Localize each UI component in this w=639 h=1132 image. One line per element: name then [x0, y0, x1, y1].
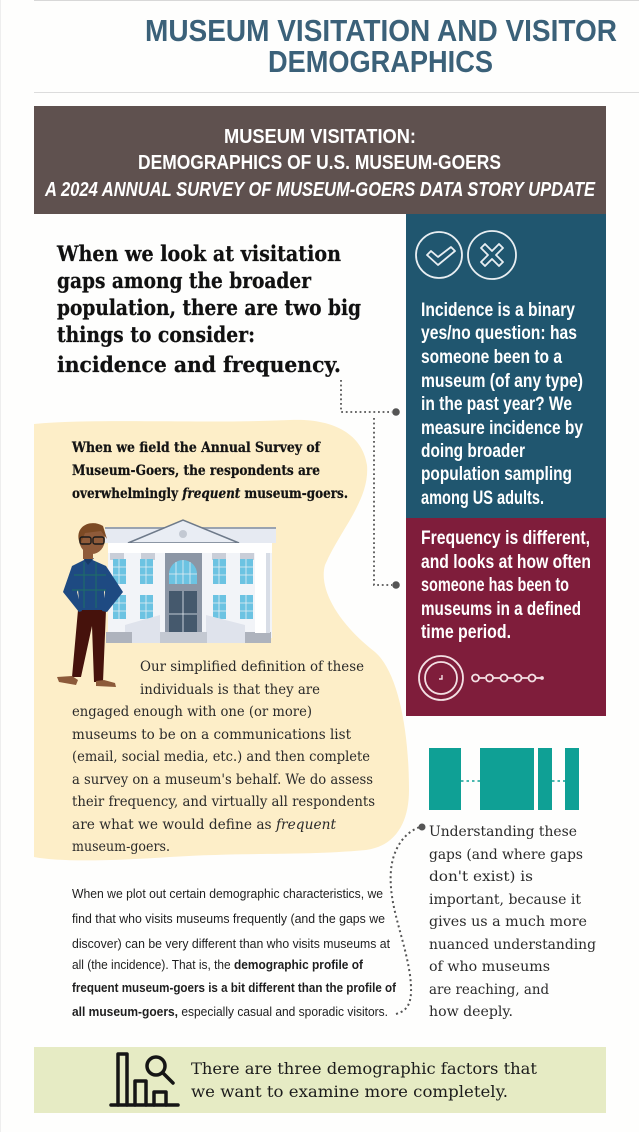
icon: teal gap bars	[429, 748, 579, 810]
definition text: museums to be on a communications list	[72, 727, 352, 743]
demographic profile text: all museum-goers, especially casual and sporadic visitors.	[72, 1005, 388, 1019]
intro heading	[56, 241, 361, 377]
gaps explanation text: of who museums	[429, 959, 550, 975]
gaps explanation text: nuanced understanding	[429, 937, 596, 953]
intro heading: things to consider:	[57, 322, 255, 347]
gaps explanation text: gives us a much more	[429, 914, 587, 930]
blob lead text	[71, 440, 348, 502]
banner heading: DEMOGRAPHICS OF U.S. MUSEUM-GOERS	[138, 152, 501, 174]
definition text: are what we would define as frequent	[72, 817, 337, 833]
definition text: museum-goers.	[72, 839, 170, 855]
frequency text: someone has been to	[421, 575, 569, 596]
callout text: we want to examine more completely.	[191, 1082, 508, 1101]
definition text: (email, social media, etc.) and then complete	[72, 749, 370, 765]
frequency text: Frequency is different,	[421, 528, 590, 549]
intro heading: incidence and frequency.	[57, 352, 341, 377]
banner heading: MUSEUM VISITATION:	[224, 126, 416, 148]
callout text: There are three demographic factors that	[191, 1059, 538, 1078]
blob lead text: When we field the Annual Survey of	[71, 440, 321, 456]
definition text: a survey on a museum's behalf. We do assess	[72, 772, 373, 788]
title	[145, 13, 617, 79]
demographic profile text: all (the incidence). That is, the demographic profile of	[72, 958, 364, 972]
icon: timeline chain	[472, 674, 543, 682]
icon: check in circle	[416, 232, 462, 278]
illustration: museum building	[105, 520, 276, 643]
gaps explanation text	[429, 824, 596, 1020]
blob lead text: Museum-Goers, the respondents are	[72, 463, 320, 479]
arrow: dotted leader to frequency	[374, 418, 400, 589]
incidence text: in the past year? We	[421, 394, 572, 415]
panel: closing callout	[34, 1047, 606, 1113]
intro heading: gaps among the broader	[57, 268, 312, 293]
incidence text: among US adults.	[421, 488, 544, 509]
panel: header banner	[34, 106, 606, 214]
icon: bar chart with magnifier	[111, 1054, 178, 1105]
intro heading: population, there are two big	[57, 295, 361, 320]
incidence text: Incidence is a binary	[421, 300, 575, 321]
gaps explanation text: don't exist) is	[429, 869, 533, 885]
gaps explanation text: important, because it	[429, 892, 581, 908]
definition text: engaged enough with one (or more)	[72, 704, 312, 720]
frequency text: time period.	[421, 622, 511, 643]
incidence text: yes/no question: has	[421, 323, 577, 344]
panel: incidence	[406, 214, 606, 518]
icon: clock	[419, 656, 463, 700]
demographic profile text	[72, 887, 397, 1019]
incidence text: museum (of any type)	[421, 371, 583, 392]
intro heading: When we look at visitation	[56, 241, 341, 266]
panel: frequent museum-goers blob	[34, 420, 409, 860]
definition text	[72, 659, 375, 855]
incidence text	[421, 300, 583, 509]
demographic profile text: find that who visits museums frequently (and the gaps we	[72, 912, 385, 926]
frequency text: and looks at how often	[421, 552, 591, 573]
illustration: standing man	[57, 523, 123, 687]
demographic profile text: frequent museum-goers is a bit different than the profile of	[72, 981, 397, 995]
demographic profile text: discover) can be very different than who visits museums at	[72, 937, 391, 951]
demographic profile text: When we plot out certain demographic characteristics, we	[72, 887, 383, 901]
gaps explanation text: Understanding these	[429, 824, 577, 840]
title: DEMOGRAPHICS	[268, 44, 493, 79]
definition text: their frequency, and virtually all respondents	[72, 794, 375, 810]
frequency text	[421, 528, 591, 643]
panel: frequency	[406, 518, 606, 716]
blob lead text: overwhelmingly frequent museum-goers.	[72, 486, 348, 502]
arrow: dotted leader to incidence	[341, 380, 400, 416]
incidence text: someone been to a	[421, 347, 562, 368]
frequency text: museums in a defined	[421, 599, 581, 620]
definition text: individuals is that they are	[140, 682, 320, 698]
gaps explanation text: are reaching, and	[429, 982, 549, 998]
incidence text: doing broader	[421, 441, 525, 462]
callout text	[191, 1059, 538, 1101]
incidence text: measure incidence by	[421, 418, 583, 439]
gaps explanation text: how deeply.	[429, 1004, 513, 1020]
gaps explanation text: gaps (and where gaps	[429, 847, 583, 863]
icon: cross in circle	[468, 231, 516, 279]
banner heading	[44, 126, 596, 201]
arrow: curved dotted leader	[391, 824, 426, 1014]
incidence text: population sampling	[421, 464, 572, 485]
definition text: Our simplified definition of these	[140, 659, 364, 675]
